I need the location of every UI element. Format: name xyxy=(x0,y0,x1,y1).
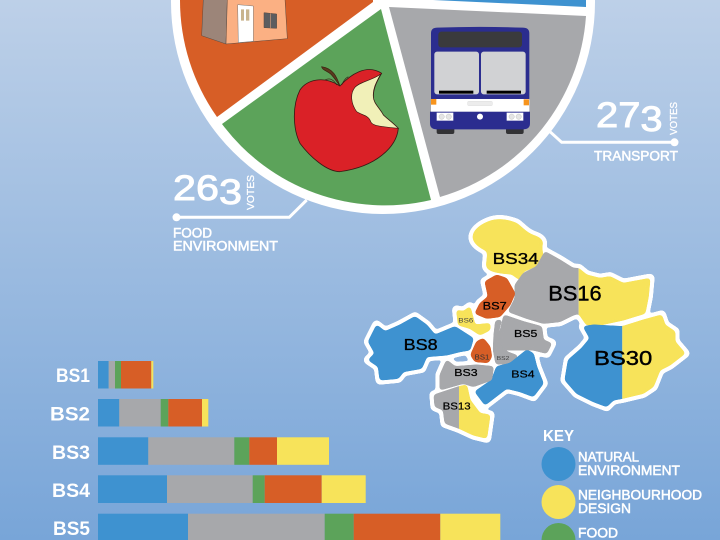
district: BS5: BS5 xyxy=(514,329,538,340)
district: BS6: BS6 xyxy=(458,318,474,325)
district: BS1 xyxy=(471,338,492,363)
bar: BS1: BS1 xyxy=(56,365,90,387)
pie slice: neighbourhood design xyxy=(180,0,373,117)
pie slice: natural environment xyxy=(433,0,586,7)
district: BS5 xyxy=(498,315,552,353)
legend item: neighbourhood design: NEIGHBOURHOOD xyxy=(578,488,702,502)
legend: key xyxy=(542,428,702,540)
bar: BS5: BS5 xyxy=(53,518,90,540)
label: food environment: ENVIRONMENT xyxy=(173,238,278,254)
leader line xyxy=(172,200,307,221)
bar: BS5 xyxy=(53,514,500,540)
district: BS34: BS34 xyxy=(493,251,539,268)
label: votes: VOTES xyxy=(245,175,257,210)
district: BS4 xyxy=(475,350,543,405)
bar chart: votes by postcode xyxy=(50,361,500,540)
district: BS16 xyxy=(508,252,650,325)
bar: BS3 xyxy=(52,437,329,465)
district: BS30 xyxy=(565,315,685,407)
pie slice: food environment xyxy=(222,9,431,205)
map: postcode districts xyxy=(368,220,685,438)
district: BS3 xyxy=(440,360,493,390)
number: 263 votes: 263 xyxy=(173,169,242,212)
district: BS8 xyxy=(368,317,473,380)
icon: apple xyxy=(294,67,398,172)
callout: transport votes xyxy=(550,95,680,164)
callout: food environment votes xyxy=(172,169,307,254)
bar: BS4: BS4 xyxy=(52,480,90,502)
district: BS13: BS13 xyxy=(443,401,471,412)
bar: BS2: BS2 xyxy=(50,404,90,426)
icon: bus xyxy=(430,27,530,134)
legend item: natural environment xyxy=(542,447,680,481)
district: BS2: BS2 xyxy=(497,356,509,362)
leader line xyxy=(550,132,678,146)
label: transport: TRANSPORT xyxy=(594,149,678,164)
district: BS16: BS16 xyxy=(548,282,602,306)
legend item: natural environment: ENVIRONMENT xyxy=(578,463,680,478)
bar: BS2 xyxy=(50,399,208,426)
map outline xyxy=(368,220,685,438)
district: BS3: BS3 xyxy=(454,368,478,379)
label: food environment: FOOD xyxy=(173,226,212,240)
legend item: food xyxy=(542,523,618,540)
legend item: neighbourhood design: DESIGN xyxy=(578,501,631,516)
district: BS8: BS8 xyxy=(404,337,438,354)
icon: house xyxy=(202,0,287,44)
district: BS13 xyxy=(434,385,490,438)
bar: BS1 xyxy=(56,361,153,388)
label: votes: VOTES xyxy=(668,102,680,135)
legend item: neighbourhood design xyxy=(542,485,702,519)
bar: BS3: BS3 xyxy=(52,442,90,464)
district: BS4: BS4 xyxy=(511,370,535,381)
pie chart xyxy=(171,0,595,214)
bar: BS4 xyxy=(52,475,366,503)
district: BS1: BS1 xyxy=(475,355,489,362)
district: BS2 xyxy=(493,320,518,364)
district: BS7: BS7 xyxy=(483,301,507,313)
district: BS34 xyxy=(473,220,543,280)
legend item: natural environment: NATURAL xyxy=(578,450,639,464)
legend heading: KEY xyxy=(543,428,575,445)
district: BS7 xyxy=(475,275,515,318)
number: 273 votes: 273 xyxy=(596,95,663,138)
pie slice: transport xyxy=(389,7,586,197)
district: BS30: BS30 xyxy=(594,348,652,370)
district: BS6 xyxy=(457,307,490,335)
